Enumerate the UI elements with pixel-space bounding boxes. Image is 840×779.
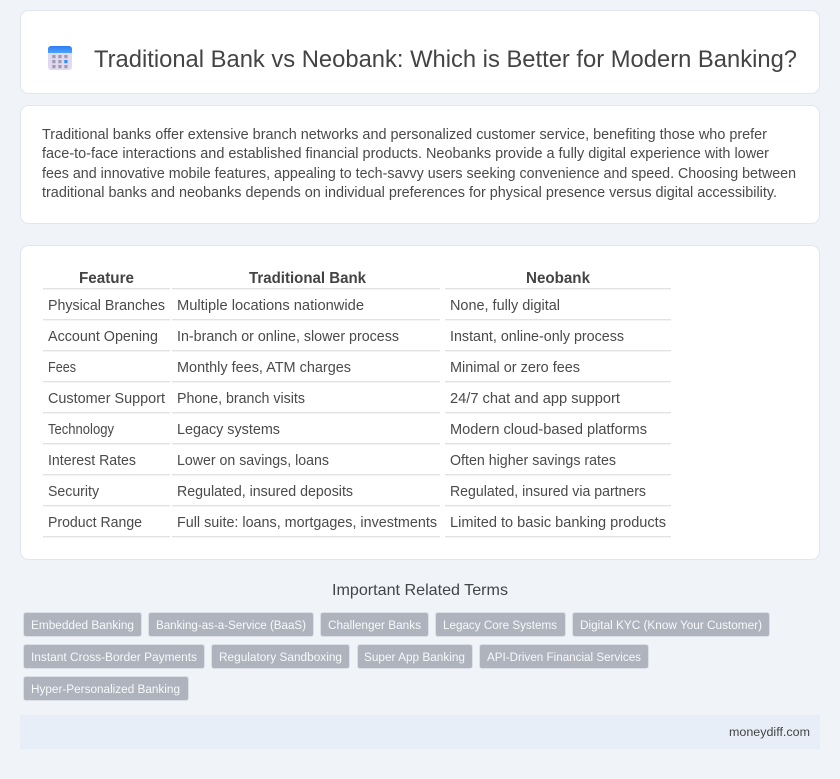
- tag: [320, 612, 428, 636]
- row: interest rates: Lower on savings, loans: [177, 453, 329, 469]
- row: account opening: Account Opening: [48, 329, 158, 345]
- row: security: [48, 484, 646, 500]
- tag: [148, 612, 314, 636]
- panel: comparison table: [20, 246, 820, 560]
- row: account opening: [48, 329, 624, 345]
- row: fees: [48, 360, 580, 376]
- row: interest rates: Interest Rates: [48, 453, 136, 469]
- row: security: Regulated, insured via partners: [450, 484, 646, 500]
- tag: Instant Cross-Border Payments: [31, 650, 197, 664]
- intro paragraph: traditional banks and neobanks depends on individual preferences for physical presence versus digital accessibility.: [42, 185, 777, 201]
- tag: Digital KYC (Know Your Customer): [580, 618, 762, 632]
- tag: Embedded Banking: [31, 618, 134, 632]
- tag: Challenger Banks: [328, 618, 421, 632]
- row: customer support: Phone, branch visits: [177, 391, 305, 407]
- footer: [20, 715, 820, 749]
- row: account opening: Instant, online-only process: [450, 329, 624, 345]
- intro paragraph: face-to-face interactions and established financial products. Neobanks provide a fully digital experience with lower: [42, 146, 769, 162]
- row: product range: Full suite: loans, mortgages, investments: [177, 515, 437, 531]
- table header: Neobank: [526, 270, 590, 287]
- row: product range: [48, 515, 666, 531]
- intro paragraph: Traditional banks offer extensive branch networks and personalized customer service, benefiting those who prefer: [42, 127, 767, 143]
- intro paragraph: fees and innovative mobile features, appealing to tech-savvy users seeking convenience and speed. Choosing between: [42, 166, 796, 182]
- row: physical branches: [48, 298, 560, 314]
- tag: Hyper-Personalized Banking: [31, 682, 180, 696]
- tag: [24, 612, 142, 636]
- table header: [79, 270, 590, 287]
- row: fees: Minimal or zero fees: [450, 360, 580, 376]
- related terms tags: [24, 612, 770, 700]
- tag: [436, 612, 566, 636]
- row: physical branches: Multiple locations nationwide: [177, 298, 364, 314]
- row: customer support: 24/7 chat and app support: [450, 391, 620, 407]
- tag: [212, 644, 350, 668]
- row: physical branches: None, fully digital: [450, 298, 560, 314]
- tag: [572, 612, 770, 636]
- row: customer support: Customer Support: [48, 391, 165, 407]
- row: fees: Monthly fees, ATM charges: [177, 360, 351, 376]
- tag: [24, 644, 204, 668]
- row: interest rates: Often higher savings rates: [450, 453, 616, 469]
- row: physical branches: Physical Branches: [48, 298, 165, 314]
- tag: Regulatory Sandboxing: [219, 650, 342, 664]
- row: technology: [48, 422, 647, 438]
- tag: API-Driven Financial Services: [487, 650, 641, 664]
- panel: introduction: [20, 106, 820, 224]
- tag: [480, 644, 648, 668]
- row: security: Regulated, insured deposits: [177, 484, 353, 500]
- intro paragraph: [42, 127, 796, 201]
- row: product range: Limited to basic banking products: [450, 515, 666, 531]
- row: fees: Fees: [48, 360, 76, 376]
- tag: [24, 676, 188, 700]
- tag: Legacy Core Systems: [443, 618, 557, 632]
- row: security: Security: [48, 484, 100, 500]
- row: account opening: In-branch or online, slower process: [177, 329, 399, 345]
- heading: related terms: Important Related Terms: [332, 582, 508, 599]
- row: technology: Legacy systems: [177, 422, 280, 438]
- title: Traditional Bank vs Neobank: Which is Better for Modern Banking?: [94, 46, 797, 73]
- table header: Feature: [79, 270, 134, 287]
- panel: title header: [20, 10, 820, 94]
- tag: [358, 644, 472, 668]
- table header: Traditional Bank: [249, 270, 366, 287]
- row: technology: Technology: [48, 422, 115, 438]
- row: customer support: [48, 391, 620, 407]
- row: technology: Modern cloud-based platforms: [450, 422, 647, 438]
- tag: Super App Banking: [364, 650, 465, 664]
- icon: calendar: [48, 46, 72, 70]
- row: interest rates: [48, 453, 616, 469]
- tag: Banking-as-a-Service (BaaS): [156, 618, 306, 632]
- footer: moneydiff.com: [729, 725, 810, 739]
- row: product range: Product Range: [48, 515, 142, 531]
